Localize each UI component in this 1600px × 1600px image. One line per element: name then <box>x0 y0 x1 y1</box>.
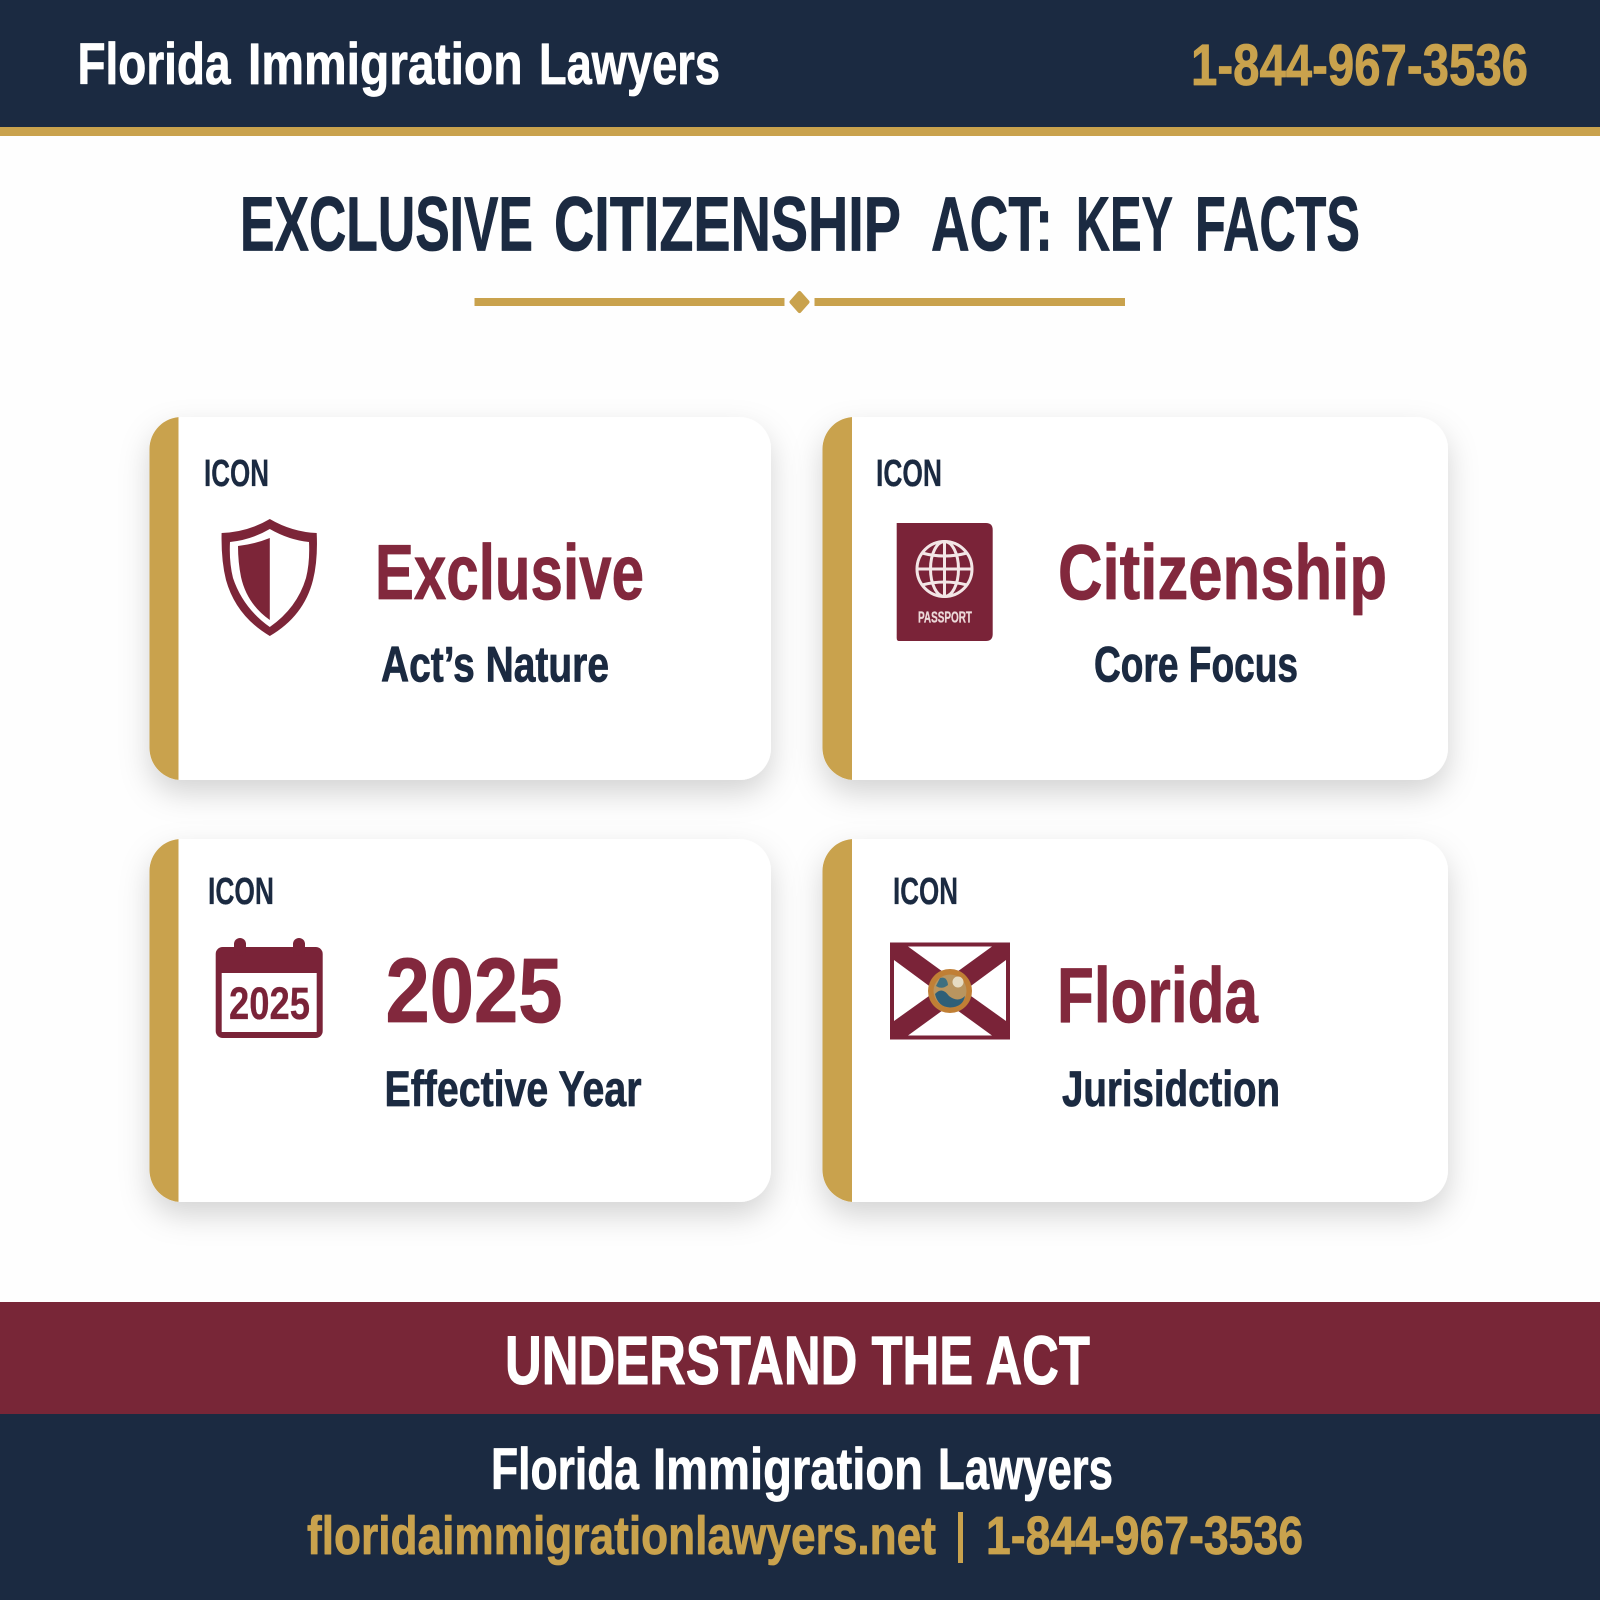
header firm name <box>78 32 720 97</box>
header bar <box>0 0 1600 136</box>
title: ACT: <box>931 182 1053 268</box>
fact heading: Exclusive <box>375 528 644 616</box>
fact caption: Effective Year <box>384 1061 642 1117</box>
header firm name: Lawyers <box>539 32 720 97</box>
footer firm name: Florida <box>491 1437 640 1502</box>
call to action banner <box>0 1302 1600 1415</box>
fact caption: Core Focus <box>1094 636 1298 692</box>
icon label: ICON <box>208 871 274 913</box>
header firm name: Florida <box>78 32 231 97</box>
fact heading: Citizenship <box>1058 528 1387 616</box>
icon: shield <box>222 519 317 636</box>
panel: Exclusive card <box>150 417 771 780</box>
title <box>240 182 1360 268</box>
icon: Florida flag <box>890 942 1010 1040</box>
panel: Citizenship card <box>822 417 1448 780</box>
icon: passport <box>897 523 993 641</box>
fact heading: 2025 <box>386 940 562 1042</box>
footer <box>0 1414 1600 1600</box>
icon: passport: PASSPORT <box>918 610 972 626</box>
footer firm name <box>491 1437 1113 1502</box>
icon label: ICON <box>204 453 269 495</box>
title: FACTS <box>1195 182 1360 268</box>
icon label: ICON <box>876 453 942 495</box>
footer firm name: Immigration <box>653 1437 923 1502</box>
icon: calendar: 2025 <box>229 978 310 1029</box>
call to action banner: UNDERSTAND THE ACT <box>505 1322 1090 1399</box>
panel: 2025 card <box>150 839 771 1202</box>
title: KEY <box>1076 182 1173 268</box>
fact caption: Jurisidction <box>1062 1061 1280 1117</box>
title divider with diamond <box>474 293 1125 311</box>
footer website: floridaimmigrationlawyers.net <box>307 1506 936 1566</box>
panel: Florida card <box>822 839 1448 1202</box>
title: CITIZENSHIP <box>554 182 901 268</box>
footer phone: 1-844-967-3536 <box>986 1506 1303 1566</box>
footer separator <box>958 1512 963 1563</box>
title: EXCLUSIVE <box>240 182 533 268</box>
footer firm name: Lawyers <box>938 1437 1113 1502</box>
icon: calendar <box>216 938 323 1038</box>
header firm name: Immigration <box>248 32 522 97</box>
fact caption: Act’s Nature <box>381 636 609 692</box>
fact heading: Florida <box>1057 951 1258 1039</box>
icon label: ICON <box>893 871 958 913</box>
header phone number: 1-844-967-3536 <box>1191 33 1528 98</box>
